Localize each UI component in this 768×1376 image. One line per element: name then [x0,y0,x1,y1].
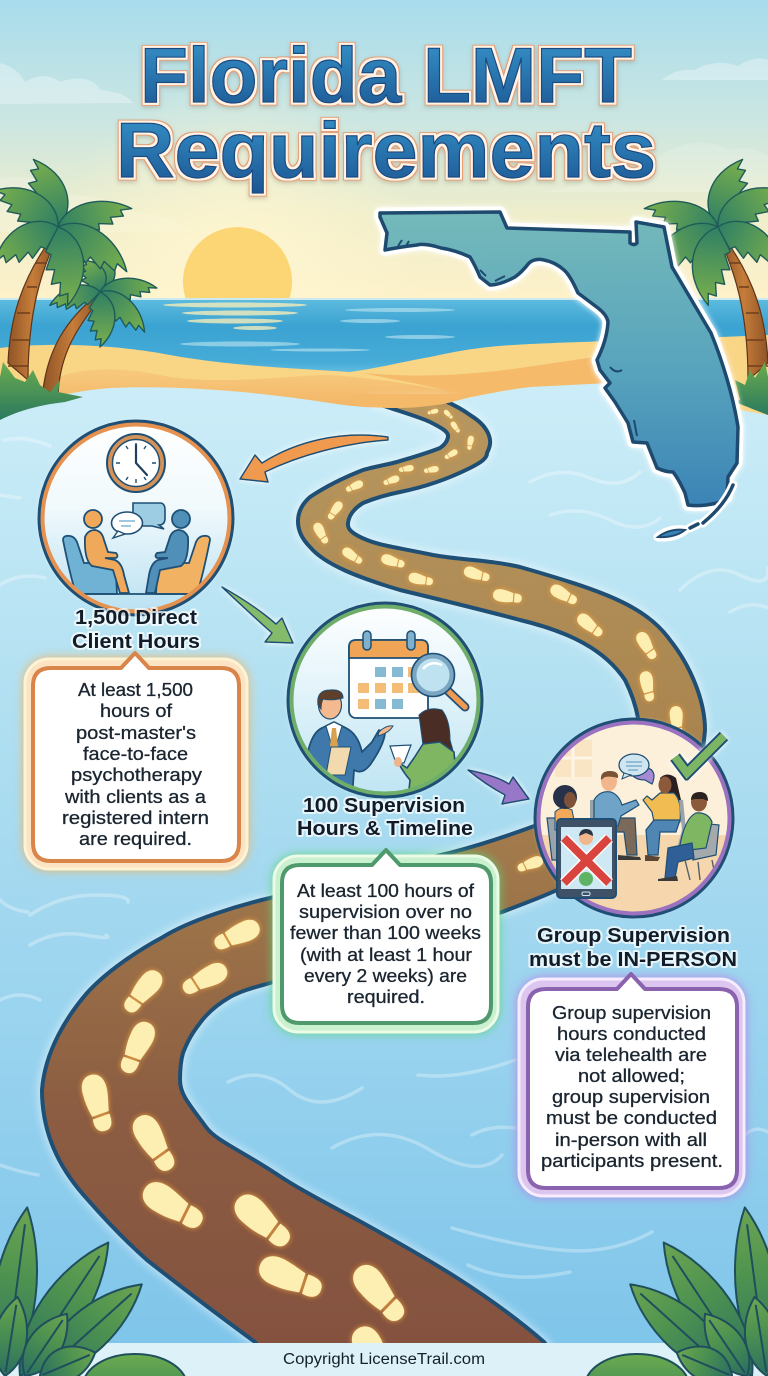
water background [0,383,768,1376]
heading: Group Supervision must be IN-PERSON: must be IN-PERSON [529,949,737,971]
icon: clock [107,434,165,492]
person: woman in yellow [643,774,684,861]
callout: direct client hours text: psychotherapy [71,764,203,785]
icon: in-person group circle [530,719,740,925]
heading: 100 Supervision Hours & Timeline: 100 Supervision [303,795,465,817]
arrow: green, step 1 to step 2 [222,587,293,643]
person: left listener [547,785,577,860]
heading: 1,500 Direct Client Hours [72,607,200,653]
person: man in blue sweater [590,771,641,860]
callout: supervision hours text: supervision over no [299,901,472,922]
callout: group supervision text: Group supervision [552,1002,711,1023]
panel: step 2 supervision hours [274,603,498,1032]
callout: direct client hours text: are required. [79,828,192,849]
winding trail [42,394,705,1376]
callout: supervision hours text: every 2 weeks) are [304,965,467,986]
heading: 100 Supervision Hours & Timeline [297,795,473,840]
speech bubbles [619,754,654,784]
right palm tree [639,153,768,380]
title [116,31,656,194]
callout: direct client hours text: At least 1,500 [78,679,193,700]
woman with paper [389,708,456,788]
callout: direct client hours text: with clients as a [64,786,207,807]
Florida Keys [658,485,733,537]
heading: Group Supervision must be IN-PERSON: Group Supervision [537,925,730,947]
icon: supervision calendar circle [288,603,482,800]
callout: direct client hours text: hours of [100,700,173,721]
callout: supervision hours text [274,850,498,1032]
callout: direct client hours text [25,653,247,869]
glowing footprints [79,408,685,1376]
sand beach [0,335,768,430]
icon: check mark [675,736,724,773]
callout: group supervision text [519,974,744,1196]
icon: calendar [349,631,428,718]
heading: Group Supervision must be IN-PERSON [529,925,737,971]
callout: supervision hours text: required. [347,986,425,1007]
callout: direct client hours text: post-master's [76,722,196,743]
background: sky [0,0,768,300]
arrow: orange, trail to step 1 [240,435,388,482]
clouds [0,58,768,232]
man with clipboard [308,689,394,786]
callout: direct client hours text: face-to-face [83,743,188,764]
heading: 1,500 Direct Client Hours: 1,500 Direct [75,607,197,629]
foliage: bottom left [0,1205,187,1376]
callout: supervision hours text: At least 100 hours of [297,880,475,901]
callout: group supervision text: in-person with all [555,1129,707,1150]
heading: 1,500 Direct Client Hours: Client Hours [72,631,200,653]
heading: 100 Supervision Hours & Timeline: Hours & Timeline [297,818,473,840]
title: Florida LMFT [140,31,632,119]
panel: step 3 group supervision [519,719,744,1196]
callout: supervision hours text: fewer than 100 weeks [290,922,481,943]
footer bar [0,1343,768,1376]
title: Requirements [116,106,656,194]
callout: group supervision text: participants present. [541,1150,723,1171]
icon: telehealth tablet crossed out [557,819,616,898]
foliage: bottom right [585,1205,768,1376]
callout: group supervision text: group supervision [552,1086,710,1107]
footer bar: Copyright LicenseTrail.com [283,1351,485,1368]
map of Florida [380,212,738,537]
callout: supervision hours text: (with at least 1 hour [300,944,472,965]
left palm trees [0,153,158,395]
icon: therapy session circle [39,421,233,615]
arrow: purple, step 2 to step 3 [468,770,529,804]
callout: group supervision text: hours conducted [557,1023,706,1044]
right beach bush [735,362,768,415]
left beach bush [0,362,83,420]
callout: group supervision text: must be conducted [546,1107,717,1128]
callout: group supervision text: via telehealth are [555,1044,707,1065]
callout: direct client hours text: registered intern [62,807,209,828]
person: man in green [658,792,719,881]
water ripples [0,438,768,1277]
panel: step 1 direct client hours [25,421,247,869]
callout: group supervision text: not allowed; [578,1065,685,1086]
sea [0,298,768,378]
window [555,740,592,777]
icon: magnifying glass [412,654,465,707]
sun [30,90,450,298]
